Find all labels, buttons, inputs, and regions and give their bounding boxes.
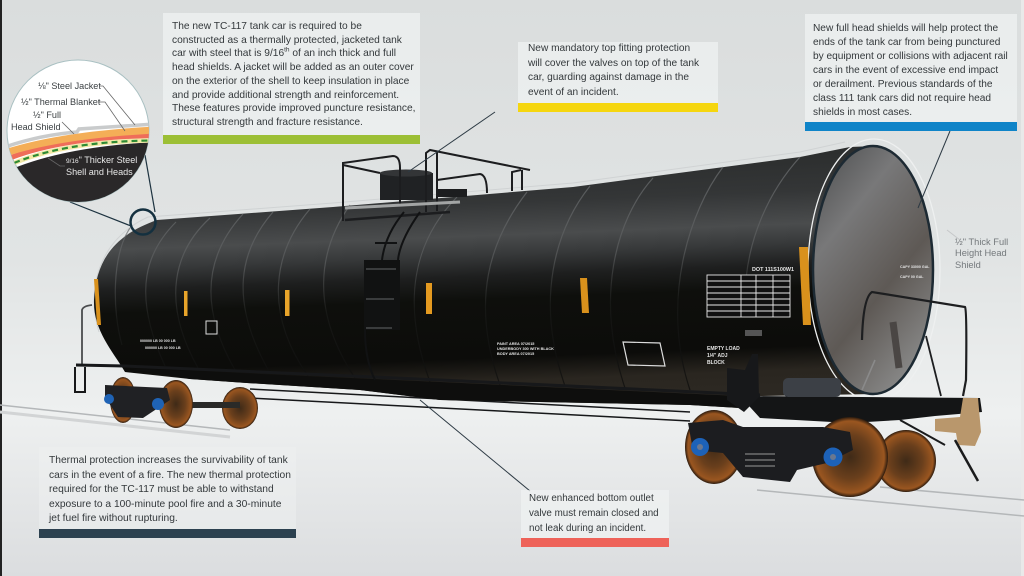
callout: TC-117 construction: constructed as a thermally protected, jacketed tank [172,35,402,46]
callout: top fitting protection: will cover the valves on top of the tank [528,58,699,69]
callout: bottom outlet valve: valve must remain closed and [529,508,659,519]
inset cross-section: ½" Thermal Blanket [21,97,101,107]
callout: full head shields: shields in most cases. [813,107,912,118]
callout: thermal protection: cars in the event of a fire. The new thermal protection [49,470,291,480]
stencil lettering: DOT 111S100W1 [752,267,794,273]
callout: bottom outlet valve [521,490,669,547]
data table [707,275,790,317]
callout: bottom outlet valve: not leak during an incident. [529,523,646,534]
front truck [685,410,936,497]
tank body [94,139,940,408]
callout: full head shields: by equipment or collisions with adjacent rail [813,51,1008,62]
callout: full head shields [805,14,1017,131]
inset cross-section: ⅛" Steel Jacket [38,81,101,91]
head shield outline [808,139,940,401]
tank halo outline [94,142,845,332]
callout: TC-117 construction: head shields. A jacket will be added as an outer cover [172,62,414,73]
callout: thermal protection: jet fuel fire without rupturing. [49,513,178,524]
head shield [813,146,933,394]
inset cross-section: Shell and Heads [66,167,133,177]
callout: TC-117 construction: car with steel that is 9/16th of an inch thick and full [172,47,396,59]
stencil lettering: 1/4" ADJ [707,353,728,359]
callout: TC-117 construction [163,13,420,144]
magnifier ring [130,210,156,234]
callout: thermal protection [39,447,296,538]
reflective stripes [94,247,811,325]
head shield label: Height Head [955,248,1007,258]
stencil lettering: BODY AREA 07/2015 [497,352,534,356]
rear truck [104,377,258,429]
stencil lettering: BLOCK [707,360,725,366]
head shield label [955,237,1008,270]
stencil lettering: PAINT AREA 07/2015 [497,342,534,346]
ladder [364,212,420,380]
callout: full head shields: class 111 tank cars did not require head [813,93,991,104]
main rail [76,365,760,395]
callout: TC-117 construction: The new TC-117 tank car is required to be [172,21,362,32]
stencil lettering: 000000 LB 00 000 LB [140,339,176,343]
side rails and end steps [75,305,690,421]
underframe shadow [125,368,760,408]
callout: TC-117 construction: on the exterior of the shell to keep insulation in place [172,76,409,87]
tank seams [115,157,800,390]
end platform rail [862,292,966,396]
head shield label: ½" Thick Full [955,237,1008,247]
callout: TC-117 construction: structural strength and fracture resistance. [172,117,363,128]
stencil lettering: EMPTY LOAD [707,346,740,352]
callout: full head shields: ends of the tank car from being punctured [813,37,1000,48]
callout: TC-117 construction: and provide additional strength and reinforcement. [172,90,399,101]
callout: thermal protection: exposure to a 100-minute pool fire and a 30-minute [49,498,281,510]
stencil lettering: 000000 LB 00 000 LB [145,346,181,350]
callout: full head shields: New full head shields will help protect the [813,23,998,34]
callout: full head shields: or derailment. Previous standards of the [813,79,993,90]
inset cross-section: Head Shield [11,122,61,132]
callout: top fitting protection: event of an incident. [528,87,619,98]
inset cross-section: 9/16" Thicker Steel [66,155,137,165]
callout: thermal protection: Thermal protection increases the survivability of tank [49,455,288,466]
leader lines [408,112,960,491]
callout: full head shields: cars in the event of excessive end impact [813,65,998,76]
callout: TC-117 construction: These features provide improved puncture resistance, [172,103,416,114]
callout: top fitting protection: car, guarding against damage in the [528,72,689,83]
callout: top fitting protection [518,42,718,112]
callout: bottom outlet valve: New enhanced bottom outlet [529,493,654,504]
magnifier connectors [70,155,155,226]
stencil lettering [140,265,930,366]
stencil lettering: UNDERBODY 300 WITH BLACK [497,347,554,351]
ground shadow lines [0,405,1024,516]
callout: thermal protection: required for the TC-117 must be able to withstand [49,484,274,495]
end frame and coupler [727,354,982,481]
top fittings and platform [343,150,530,221]
inset cross-section: ½" Full [33,110,61,120]
inset cross-section [6,60,150,202]
callout: top fitting protection: New mandatory top fitting protection [528,43,690,54]
head shield label: Shield [955,260,981,270]
stencil lettering: CAPY 00 GAL [900,275,924,279]
stencil lettering: CAPY 33000 GAL [900,265,930,269]
